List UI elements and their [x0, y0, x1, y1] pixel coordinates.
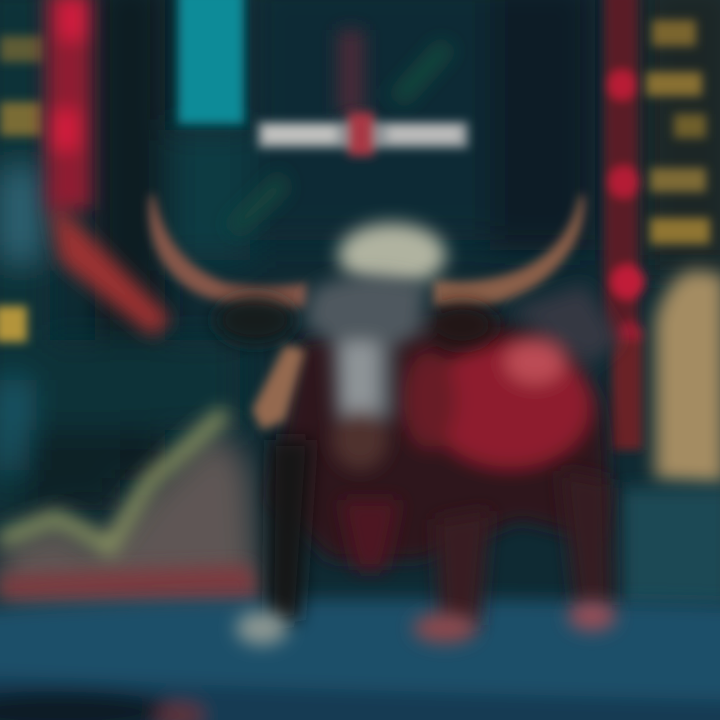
blurred logo text [258, 112, 468, 156]
shoulder shadow [215, 296, 295, 344]
left ticker: olive labels [0, 36, 44, 342]
beige pillar [655, 270, 720, 485]
line chart: left [0, 412, 260, 610]
chart area [0, 425, 260, 610]
legs [268, 440, 612, 625]
floor [0, 599, 720, 720]
right horn [435, 195, 582, 306]
head [305, 276, 496, 470]
central chart streaks [225, 30, 455, 235]
hooves [236, 601, 616, 645]
right ticker: amber labels [646, 20, 710, 244]
teal screen panel [178, 0, 244, 124]
bull [151, 195, 620, 645]
chart line [0, 412, 225, 548]
left horn [151, 195, 305, 307]
teal block, right [622, 488, 720, 608]
right red ticker column [604, 0, 645, 450]
head crown [338, 223, 446, 287]
body [270, 285, 620, 560]
red ticker column with falling arrow [46, 0, 172, 336]
foreleg highlight [252, 345, 305, 430]
background: market screens [0, 0, 720, 520]
